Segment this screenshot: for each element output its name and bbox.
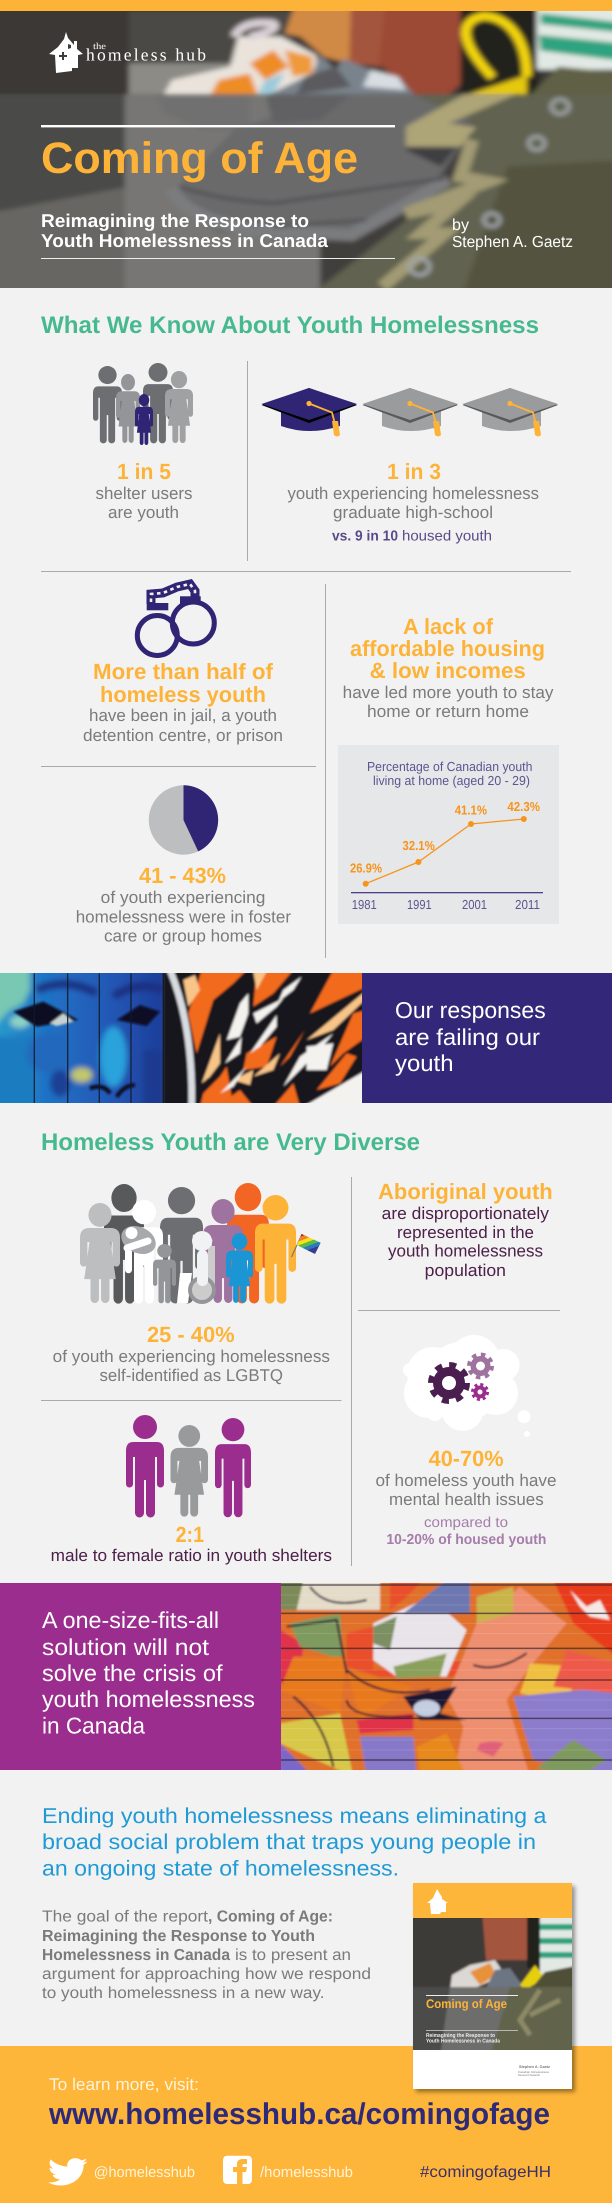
text: represented in the bbox=[397, 1223, 534, 1242]
axis bbox=[351, 892, 543, 893]
headline: Aboriginal youth bbox=[378, 1179, 553, 1204]
cover title: Youth Homelessness in Canada bbox=[426, 2038, 501, 2044]
blue statement: Ending youth homelessness means eliminating a bbox=[42, 1804, 547, 1828]
banner text: youth bbox=[395, 1050, 454, 1076]
report description: argument for approaching how we respond bbox=[42, 1966, 371, 1983]
axis labels bbox=[352, 897, 540, 912]
logo: the homeless hub bbox=[49, 32, 206, 73]
banner text: solution will not bbox=[42, 1634, 210, 1660]
baby in sling bbox=[117, 1221, 160, 1259]
banner photo: face mural bbox=[0, 973, 362, 1103]
comparison: 10-20% of housed youth bbox=[386, 1532, 546, 1548]
icon: twitter bbox=[48, 2158, 88, 2185]
report description bbox=[42, 1909, 371, 2002]
cover title: Coming of Age bbox=[426, 1997, 507, 2011]
banner text: youth homelessness bbox=[42, 1686, 255, 1712]
text: detention centre, or prison bbox=[83, 726, 283, 745]
text: of homeless youth have bbox=[376, 1471, 556, 1490]
stat: 1 in 3 bbox=[387, 459, 441, 484]
author bbox=[452, 217, 573, 251]
banner text: in Canada bbox=[42, 1713, 145, 1739]
subtitle: Youth Homelessness in Canada bbox=[41, 230, 329, 251]
cover credits bbox=[518, 2065, 550, 2077]
header rule top bbox=[41, 125, 395, 127]
panel: foster care bbox=[76, 785, 291, 946]
report description: Reimagining the Response to Youth bbox=[42, 1928, 315, 1945]
line chart bbox=[338, 745, 559, 924]
banner panel bbox=[0, 1583, 281, 1770]
axis labels: 1991 bbox=[407, 897, 432, 912]
report description: The goal of the report bbox=[42, 1909, 209, 1926]
text: have been in jail, a youth bbox=[89, 706, 277, 725]
pie chart bbox=[149, 785, 218, 855]
text: youth homelessness bbox=[388, 1242, 543, 1261]
stat: 25 - 40% bbox=[147, 1322, 235, 1347]
text: are youth bbox=[108, 503, 179, 522]
text: graduate high-school bbox=[333, 503, 493, 522]
text bbox=[83, 706, 283, 745]
headline: More than half of bbox=[93, 659, 274, 684]
panel: affordable housing bbox=[338, 614, 559, 924]
text bbox=[288, 484, 539, 522]
text bbox=[53, 1347, 330, 1385]
axis labels: 2011 bbox=[515, 897, 540, 912]
rainbow flag bbox=[292, 1234, 321, 1257]
comparison bbox=[332, 528, 492, 544]
blue statement bbox=[42, 1804, 547, 1881]
comparison bbox=[386, 1515, 546, 1548]
banner text bbox=[42, 1607, 255, 1739]
text: homelessness were in foster bbox=[76, 908, 291, 927]
facebook handle: /homelesshub bbox=[260, 2164, 353, 2181]
report description: to youth homelessness in a new way. bbox=[42, 1985, 324, 2002]
headline bbox=[93, 659, 274, 707]
headline: & low incomes bbox=[370, 658, 526, 683]
wheelchair user bbox=[177, 1231, 215, 1303]
cover credits: Research Network bbox=[518, 2073, 541, 2077]
subtitle: Reimagining the Response to bbox=[41, 210, 309, 231]
cover photo bbox=[413, 1918, 572, 2050]
banner text: solve the crisis of bbox=[42, 1660, 223, 1686]
text: of youth experiencing homelessness bbox=[53, 1347, 330, 1366]
cover credits: Canadian Homelessness bbox=[518, 2070, 550, 2074]
axis labels: 1981 bbox=[352, 897, 377, 912]
banner text: Our responses bbox=[395, 997, 546, 1023]
author: Stephen A. Gaetz bbox=[452, 234, 573, 251]
cover title bbox=[426, 1995, 518, 2044]
text: youth experiencing homelessness bbox=[288, 484, 539, 503]
data line bbox=[363, 816, 527, 887]
banner: one size fits all bbox=[0, 1573, 612, 1780]
text bbox=[376, 1471, 556, 1509]
text: self-identified as LGBTQ bbox=[100, 1366, 283, 1385]
subtitle bbox=[41, 210, 329, 251]
text: mental health issues bbox=[389, 1490, 544, 1509]
axis labels: 2001 bbox=[462, 897, 487, 912]
report description: Homelessness in Canada bbox=[42, 1947, 230, 1964]
text: are disproportionately bbox=[382, 1204, 550, 1223]
icon: thought cloud with gears bbox=[403, 1335, 530, 1437]
panel: jail bbox=[83, 584, 283, 745]
text: of youth experiencing bbox=[101, 888, 265, 907]
top orange bar bbox=[0, 0, 612, 12]
comparison: compared to bbox=[424, 1515, 508, 1531]
chart title bbox=[367, 759, 532, 788]
to learn more: To learn more, visit: bbox=[49, 2075, 199, 2094]
icon: diverse people group bbox=[80, 1183, 321, 1304]
text bbox=[343, 683, 554, 721]
cover logo bbox=[427, 1889, 448, 1914]
panel: gender ratio bbox=[51, 1415, 332, 1565]
text bbox=[382, 1204, 550, 1280]
author: by bbox=[452, 217, 469, 234]
logo: the homeless hub: the bbox=[93, 41, 106, 51]
icon: three people bbox=[126, 1415, 251, 1518]
report description: , Coming of Age: bbox=[208, 1909, 333, 1926]
text: shelter users bbox=[96, 484, 192, 503]
header rule bottom bbox=[41, 258, 395, 259]
panel: 1 in 5 bbox=[93, 363, 193, 522]
url: www.homelesshub.ca/comingofage bbox=[48, 2098, 550, 2131]
panel: LGBTQ bbox=[53, 1183, 330, 1385]
cover title: Reimagining the Response to bbox=[426, 2033, 496, 2039]
heading: what we know: What We Know About Youth Homelessness bbox=[41, 312, 539, 339]
headline: A lack of bbox=[403, 614, 494, 639]
data labels bbox=[350, 799, 540, 876]
icon: family group bbox=[93, 363, 193, 445]
logo: the homeless hub: homeless hub bbox=[86, 44, 206, 64]
panel: 1 in 3 bbox=[262, 388, 558, 544]
data labels: 42.3% bbox=[507, 799, 540, 814]
header photo: sneakers bbox=[0, 0, 612, 301]
chart title: living at home (aged 20 - 29) bbox=[373, 773, 530, 788]
text: male to female ratio in youth shelters bbox=[51, 1546, 332, 1565]
data labels: 26.9% bbox=[350, 861, 382, 876]
headline: affordable housing bbox=[350, 636, 545, 661]
panel: footer bbox=[0, 2046, 612, 2203]
icon: handcuffs bbox=[137, 584, 214, 656]
banner text bbox=[395, 997, 546, 1076]
text: have led more youth to stay bbox=[343, 683, 554, 702]
cover credits: Stephen A. Gaetz bbox=[519, 2065, 550, 2069]
chart title: Percentage of Canadian youth bbox=[367, 759, 532, 774]
banner text: A one-size-fits-all bbox=[42, 1607, 219, 1633]
report description: is to present an bbox=[235, 1947, 351, 1964]
data labels: 32.1% bbox=[402, 838, 435, 853]
comparison: housed youth bbox=[402, 528, 492, 544]
text bbox=[96, 484, 192, 522]
blue statement: an ongoing state of homelessness. bbox=[42, 1857, 399, 1881]
stat: 40-70% bbox=[429, 1446, 504, 1471]
text: population bbox=[425, 1261, 506, 1280]
stat: 2:1 bbox=[176, 1522, 204, 1547]
text: home or return home bbox=[367, 702, 529, 721]
hashtag: #comingofageHH bbox=[420, 2164, 551, 2181]
data labels: 41.1% bbox=[455, 803, 487, 818]
banner panel bbox=[362, 973, 612, 1103]
stat: 41 - 43% bbox=[139, 863, 226, 888]
icon: facebook bbox=[223, 2156, 252, 2184]
stat: 1 in 5 bbox=[117, 459, 171, 484]
panel: aboriginal youth bbox=[378, 1179, 553, 1280]
text bbox=[76, 888, 291, 946]
panel: mental health bbox=[376, 1335, 556, 1548]
comparison: vs. 9 in 10 bbox=[332, 528, 398, 544]
headline: homeless youth bbox=[100, 682, 266, 707]
banner text: are failing our bbox=[395, 1024, 540, 1050]
twitter handle: @homelesshub bbox=[94, 2164, 195, 2181]
report cover bbox=[405, 1883, 580, 2089]
text: care or group homes bbox=[104, 927, 262, 946]
banner photo: graffiti bbox=[281, 1583, 612, 1770]
banner: responses failing bbox=[0, 973, 612, 1103]
headline bbox=[350, 614, 545, 683]
heading: diverse: Homeless Youth are Very Diverse bbox=[41, 1129, 420, 1156]
icon: graduation caps bbox=[262, 388, 558, 436]
title: Coming of Age bbox=[41, 134, 358, 183]
blue statement: broad social problem that traps young people in bbox=[42, 1830, 536, 1854]
panel: header bbox=[0, 0, 612, 301]
